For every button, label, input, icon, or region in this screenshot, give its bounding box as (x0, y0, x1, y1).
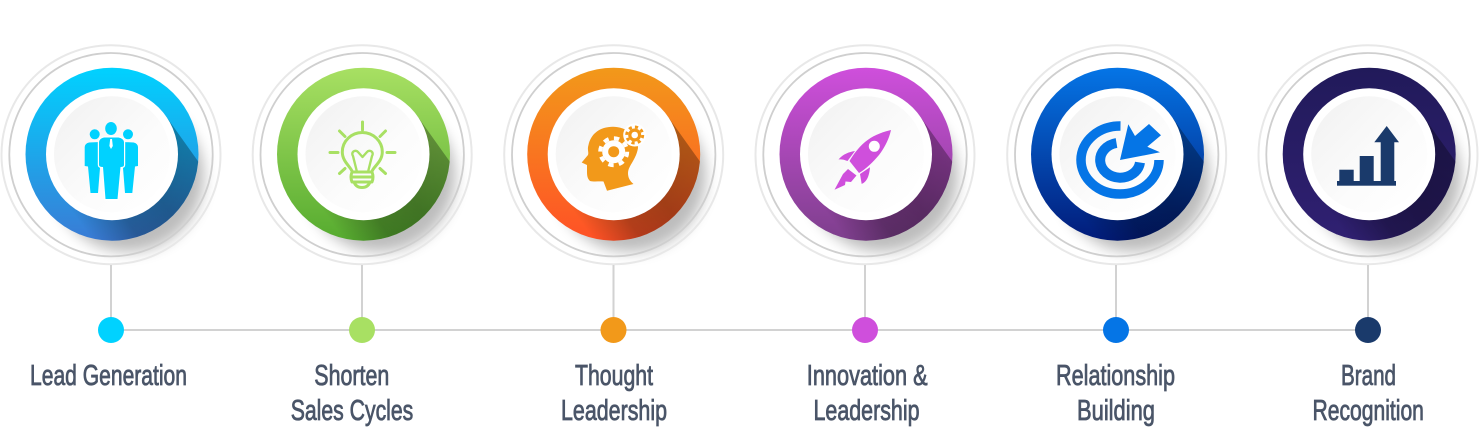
connector (1115, 265, 1117, 330)
disc shadow (806, 100, 958, 252)
label: Lead Generation (30, 360, 187, 392)
node dot (852, 317, 878, 343)
disc shadow (304, 100, 456, 252)
connector (1367, 265, 1369, 330)
rings (504, 45, 723, 264)
icon: people (85, 122, 138, 199)
step 3: Thought Leadership (504, 45, 737, 427)
label (1312, 360, 1424, 427)
step 1: Lead Generation (2, 45, 236, 392)
label (561, 360, 667, 427)
label (1056, 360, 1175, 427)
disc (780, 68, 952, 241)
connector (612, 265, 614, 330)
label: Brand (1341, 360, 1396, 392)
icon: rising bars with arrow (1337, 126, 1399, 186)
rings (756, 45, 974, 264)
connector (361, 265, 363, 330)
rings (1007, 45, 1226, 264)
disc shadow (1058, 100, 1210, 252)
icon: target with arrow (1081, 124, 1161, 194)
disc (26, 68, 198, 241)
label (291, 360, 413, 427)
step 4: Innovation & Leadership (756, 45, 990, 427)
icon: head with gears (582, 124, 646, 191)
step 6: Brand Recognition (1258, 45, 1479, 427)
connector (110, 265, 112, 330)
label: Thought (575, 360, 653, 392)
label: Recognition (1312, 395, 1424, 427)
node dot (98, 317, 124, 343)
step 2: Shorten Sales Cycles (253, 45, 487, 427)
label: Relationship (1056, 360, 1175, 392)
rings (1258, 45, 1478, 264)
label: Leadership (561, 395, 667, 427)
node dot (600, 317, 626, 343)
rings (253, 45, 472, 264)
label: Leadership (814, 395, 920, 427)
disc (1031, 68, 1204, 241)
label (807, 360, 928, 427)
step 5: Relationship Building (1007, 45, 1241, 427)
disc shadow (1309, 100, 1461, 252)
label: Sales Cycles (291, 395, 413, 427)
label: Building (1077, 395, 1155, 427)
disc (1282, 68, 1456, 241)
rings (2, 45, 220, 264)
node dot (1355, 317, 1381, 343)
disc shadow (554, 100, 706, 252)
icon: light bulb (330, 122, 395, 188)
disc (527, 68, 700, 241)
disc (277, 68, 450, 241)
node dot (349, 317, 375, 343)
node dot (1103, 317, 1129, 343)
timeline connector (111, 329, 1368, 331)
disc shadow (52, 100, 204, 252)
label: Innovation & (807, 360, 928, 392)
icon: rocket (834, 130, 891, 190)
label: Shorten (314, 360, 389, 392)
connector (864, 265, 866, 330)
